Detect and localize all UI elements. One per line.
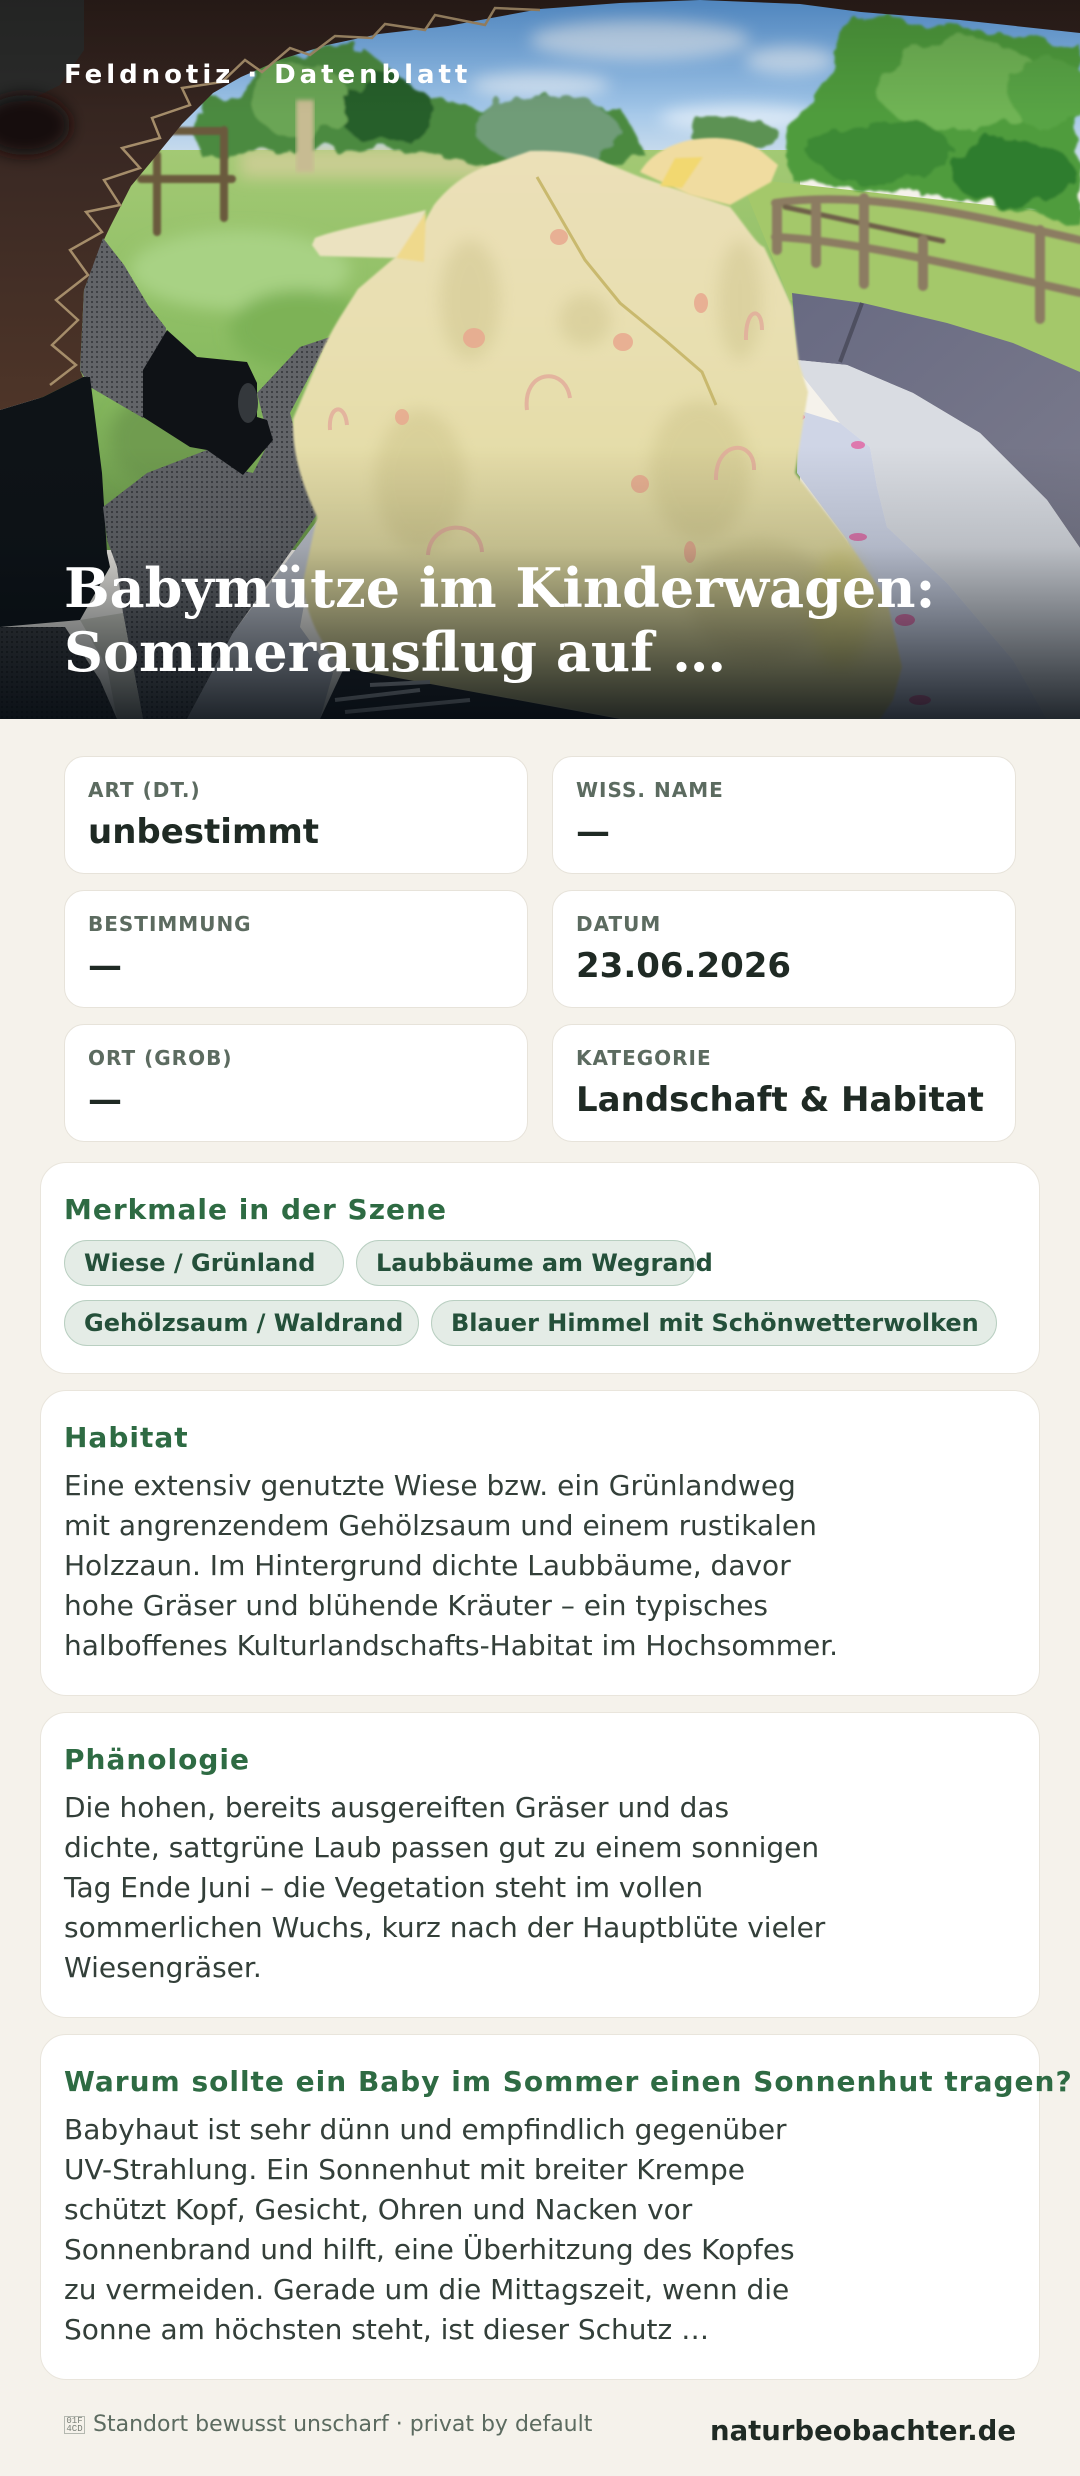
panel: Merkmale bbox=[40, 1162, 1040, 1374]
text: Habitat bbox=[64, 1469, 838, 1662]
card: Kategorie bbox=[552, 1024, 1016, 1142]
text: Phänologie: sommerlichen Wuchs, kurz nach der Hauptblüte vieler bbox=[64, 1911, 825, 1944]
chip: Wiese bbox=[64, 1240, 344, 1286]
heading: Warum Sonnenhut: Warum sollte ein Baby im Sommer einen Sonnenhut tragen? bbox=[64, 2065, 1073, 2098]
text: Warum Sonnenhut: schützt Kopf, Gesicht, Ohren und Nacken vor bbox=[64, 2193, 692, 2226]
text: Habitat: Eine extensiv genutzte Wiese bzw. ein Grünlandweg bbox=[64, 1469, 796, 1502]
card: Art: ART (DT.) bbox=[88, 778, 201, 802]
card: Bestimmung: BESTIMMUNG bbox=[88, 912, 252, 936]
title bbox=[64, 556, 935, 684]
chip: Gehölzsaum bbox=[64, 1300, 419, 1346]
wooden fences bbox=[141, 130, 1080, 319]
card: Datum: 23.06.2026 bbox=[576, 946, 791, 986]
text: Warum Sonnenhut bbox=[64, 2113, 795, 2346]
footer note: Standort bewusst unscharf · privat by default bbox=[93, 2412, 592, 2437]
text: Phänologie: Die hohen, bereits ausgereiften Gräser und das bbox=[64, 1791, 729, 1824]
panel: Phänologie bbox=[40, 1712, 1040, 2018]
card: Bestimmung: — bbox=[88, 946, 122, 986]
hat shading bbox=[375, 240, 830, 660]
icon: missing-glyph box bbox=[64, 2416, 85, 2434]
background trees bbox=[190, 16, 1080, 225]
text: Phänologie: Tag Ende Juni – die Vegetation steht im vollen bbox=[64, 1871, 703, 1904]
heading: Habitat: Habitat bbox=[64, 1421, 189, 1454]
tree post bbox=[296, 100, 314, 172]
card: wissenschaftlicher Name: — bbox=[576, 812, 610, 852]
title: Babymütze im Kinderwagen: bbox=[64, 556, 935, 620]
text: Phänologie: dichte, sattgrüne Laub passen gut zu einem sonnigen bbox=[64, 1831, 819, 1864]
chip: Laubbäume: Laubbäume am Wegrand bbox=[376, 1249, 713, 1277]
image darkening overlay bbox=[0, 0, 1080, 719]
baby sun hat bbox=[293, 138, 902, 719]
text: Warum Sonnenhut: UV-Strahlung. Ein Sonnenhut mit breiter Krempe bbox=[64, 2153, 745, 2186]
text: Habitat: Holzzaun. Im Hintergrund dichte Laubbäume, davor bbox=[64, 1549, 791, 1582]
photo illustration: baby hat in stroller bbox=[0, 0, 1080, 719]
hat paw prints bbox=[395, 229, 708, 563]
text: Warum Sonnenhut: Sonnenbrand und hilft, eine Überhitzung des Kopfes bbox=[64, 2233, 795, 2266]
meadow bbox=[40, 148, 1080, 550]
card: Ort bbox=[64, 1024, 528, 1142]
text: Warum Sonnenhut: zu vermeiden. Gerade um die Mittagszeit, wenn die bbox=[64, 2273, 789, 2306]
stroller hood leather bbox=[0, 0, 1080, 410]
kicker: Feldnotiz · Datenblatt bbox=[64, 60, 471, 90]
card: Datum bbox=[552, 890, 1016, 1008]
hero photo panel bbox=[0, 0, 1080, 719]
panel: Habitat bbox=[40, 1390, 1040, 1696]
card: Kategorie: KATEGORIE bbox=[576, 1046, 712, 1070]
card: Kategorie: Landschaft & Habitat bbox=[576, 1080, 984, 1120]
chip: Blauer Himmel: Blauer Himmel mit Schönwetterwolken bbox=[451, 1309, 979, 1337]
stroller frame and mesh arm bbox=[0, 238, 333, 719]
stroller bassinet bbox=[792, 293, 1080, 719]
text: Warum Sonnenhut: Sonne am höchsten steht, ist dieser Schutz … bbox=[64, 2313, 709, 2346]
text: Habitat: halboffenes Kulturlandschafts-Habitat im Hochsommer. bbox=[64, 1629, 838, 1662]
text: Phänologie bbox=[64, 1791, 826, 1984]
hat ears bbox=[312, 138, 778, 262]
footer site name: naturbeobachter.de bbox=[710, 2415, 1016, 2447]
icon: missing-glyph box: 01F bbox=[66, 2416, 83, 2426]
floral blanket bbox=[795, 410, 1047, 719]
heading: Phänologie: Phänologie bbox=[64, 1743, 250, 1776]
card: Art bbox=[64, 756, 528, 874]
striped baby clothing bbox=[320, 668, 620, 719]
chip: Blauer Himmel bbox=[431, 1300, 997, 1346]
icon: missing-glyph box: 4CD bbox=[66, 2424, 83, 2434]
hat seam bbox=[537, 177, 716, 405]
card: Bestimmung bbox=[64, 890, 528, 1008]
card: Art: unbestimmt bbox=[88, 812, 319, 852]
chip: Laubbäume bbox=[356, 1240, 696, 1286]
text: Habitat: mit angrenzendem Gehölzsaum und einem rustikalen bbox=[64, 1509, 817, 1542]
text: Habitat: hohe Gräser und blühende Kräuter – ein typisches bbox=[64, 1589, 768, 1622]
title: Sommerausflug auf … bbox=[64, 620, 726, 684]
card: wissenschaftlicher Name: WISS. NAME bbox=[576, 778, 724, 802]
chip: Wiese: Wiese / Grünland bbox=[84, 1249, 315, 1277]
leather stitching bbox=[50, 8, 540, 385]
heading: Merkmale: Merkmale in der Szene bbox=[64, 1193, 447, 1226]
card: Datum: DATUM bbox=[576, 912, 661, 936]
card: Ort: ORT (GROB) bbox=[88, 1046, 232, 1070]
sky bbox=[150, 0, 1080, 170]
card: Ort: — bbox=[88, 1080, 122, 1120]
text: Warum Sonnenhut: Babyhaut ist sehr dünn und empfindlich gegenüber bbox=[64, 2113, 787, 2146]
chip: Gehölzsaum: Gehölzsaum / Waldrand bbox=[84, 1309, 403, 1337]
text: Phänologie: Wiesengräser. bbox=[64, 1951, 262, 1984]
hat rainbow prints bbox=[330, 313, 762, 555]
panel: Warum Sonnenhut bbox=[40, 2034, 1040, 2380]
card: wissenschaftlicher Name bbox=[552, 756, 1016, 874]
